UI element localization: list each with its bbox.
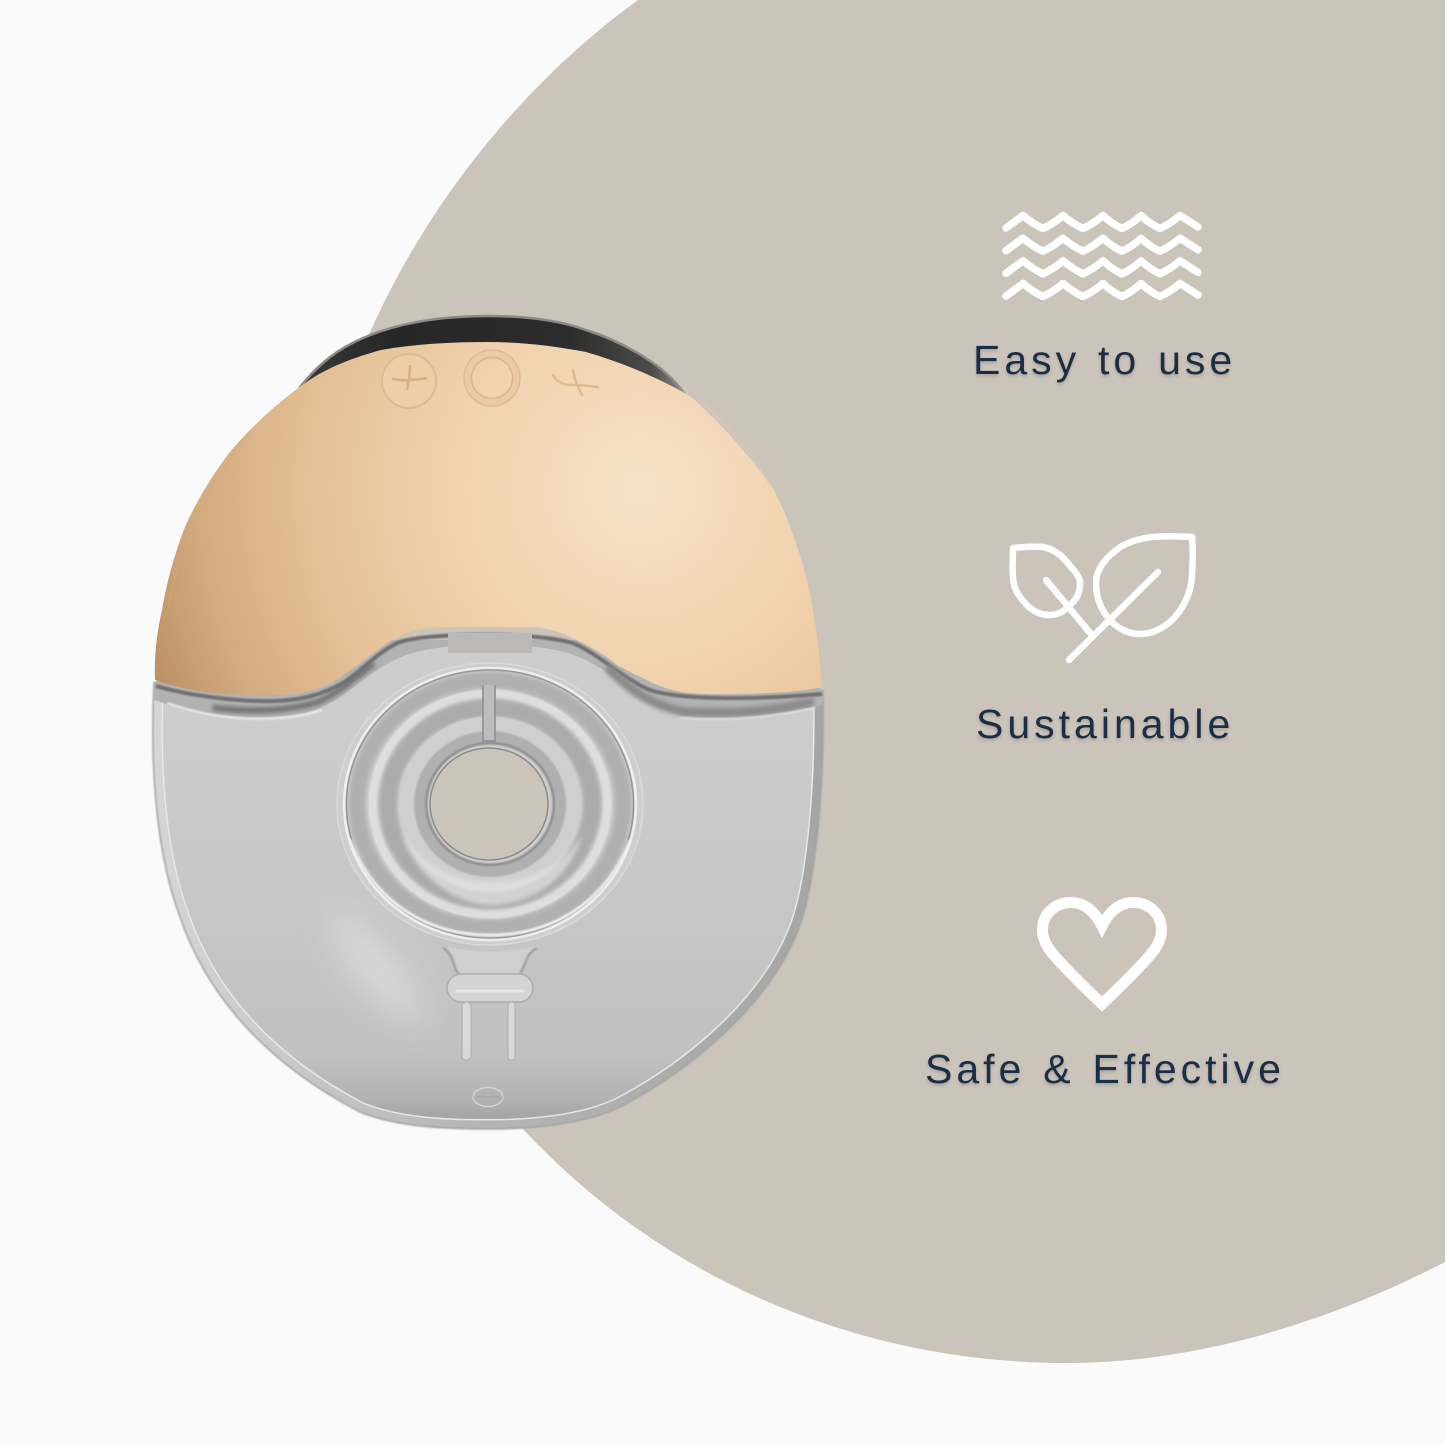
button: plus xyxy=(553,370,598,395)
soft highlight in cup xyxy=(328,900,425,1025)
feature: sustainable xyxy=(976,536,1234,747)
icon: heart xyxy=(1042,902,1162,1004)
pump clear lower cup xyxy=(153,635,823,1129)
small base mark xyxy=(473,1088,503,1106)
icon: leaves xyxy=(1013,536,1193,660)
feature: easy to use xyxy=(973,216,1236,383)
button: minus xyxy=(382,354,436,408)
valve stem xyxy=(443,946,537,1060)
pump screen window xyxy=(301,316,683,392)
label: easy to use: Easy to use xyxy=(973,337,1236,383)
background circle xyxy=(346,0,1445,1363)
icon: waves xyxy=(1006,216,1198,296)
button: power ring xyxy=(464,350,520,406)
top flange tab xyxy=(448,633,532,653)
pump tan cap xyxy=(155,342,822,695)
flange rings xyxy=(337,663,643,945)
product: wearable breast pump xyxy=(153,316,823,1129)
flange centre hole xyxy=(430,748,548,860)
rim under the cap xyxy=(154,640,823,717)
label: sustainable: Sustainable xyxy=(976,701,1234,747)
feature: safe and effective xyxy=(925,902,1285,1092)
pump seam lines xyxy=(168,404,772,607)
label: safe and effective: Safe & Effective xyxy=(925,1046,1285,1092)
